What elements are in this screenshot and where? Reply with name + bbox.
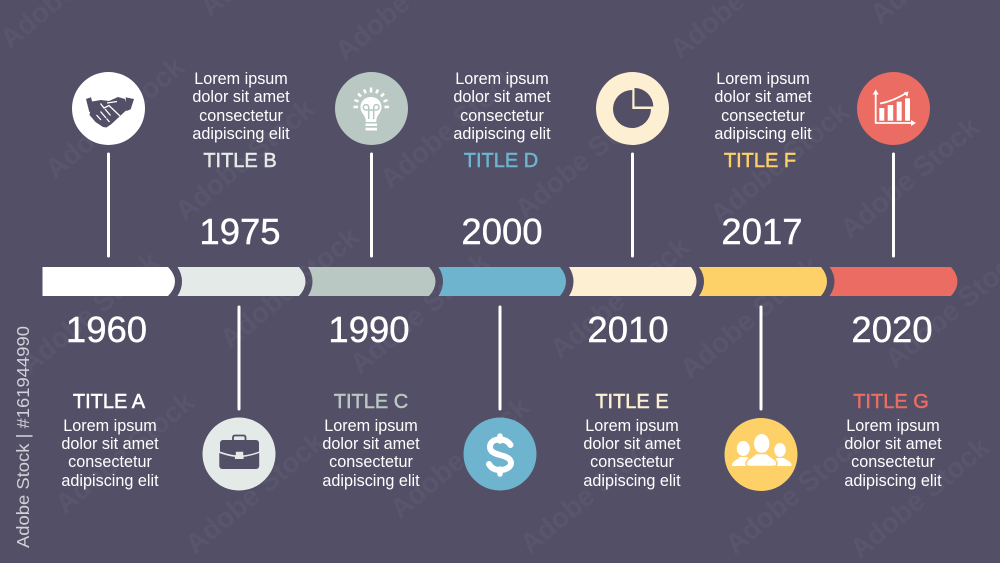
- text: Adobe Stock: [344, 246, 495, 380]
- text: Adobe Stock: [704, 96, 855, 230]
- text: Adobe Stock: [674, 251, 825, 385]
- icon: growth chart: [857, 72, 930, 145]
- block 2010: [583, 309, 681, 490]
- block 1960: consectetur: [68, 453, 152, 471]
- text: Adobe Stock: [214, 221, 365, 355]
- block 1990: adipiscing elit: [322, 472, 420, 490]
- block 1975: adipiscing elit: [192, 125, 290, 143]
- text: Adobe Stock: [719, 426, 870, 560]
- icon: light bulb: [335, 72, 408, 145]
- block 2010: dolor sit amet: [583, 435, 681, 453]
- block 2010: adipiscing elit: [583, 472, 681, 490]
- block 2017: 2017: [721, 211, 803, 252]
- block 1990: Lorem ipsum: [324, 417, 418, 435]
- block 2020: 2020: [851, 309, 933, 350]
- block 1960: TITLE A: [73, 391, 146, 413]
- block 2000: adipiscing elit: [453, 125, 551, 143]
- block 1990: consectetur: [329, 453, 413, 471]
- block 2000: consectetur: [460, 107, 544, 125]
- block 2020: Lorem ipsum: [846, 417, 940, 435]
- icon: dollar: [464, 418, 536, 490]
- segment 1975: [178, 267, 306, 296]
- block 2010: consectetur: [590, 453, 674, 471]
- segment 2020: [830, 267, 958, 296]
- block 2017: adipiscing elit: [714, 125, 812, 143]
- block 2010: Lorem ipsum: [585, 417, 679, 435]
- segment 2000: [438, 267, 566, 296]
- block 1990: TITLE C: [334, 391, 408, 413]
- block 2010: TITLE E: [595, 391, 669, 413]
- block 1960: [61, 309, 159, 490]
- block 1960: dolor sit amet: [61, 435, 159, 453]
- block 2017: consectetur: [721, 107, 805, 125]
- icon: people: [724, 418, 798, 491]
- text: Adobe Stock: [39, 51, 190, 185]
- block 1990: [322, 309, 420, 490]
- block 1975: dolor sit amet: [192, 88, 290, 106]
- text: Adobe Stock: [544, 231, 695, 365]
- block 2020: consectetur: [851, 453, 935, 471]
- stock id label: Adobe Stock | #161944990: [13, 326, 33, 548]
- text: Adobe Stock: [14, 246, 165, 380]
- block 2020: dolor sit amet: [844, 435, 942, 453]
- text: Adobe Stock: [844, 431, 995, 563]
- block 1975: consectetur: [199, 107, 283, 125]
- segment 1990: [308, 267, 436, 296]
- text: Adobe Stock: [384, 391, 535, 525]
- text: Adobe Stock: [509, 91, 660, 225]
- block 2020: TITLE G: [853, 391, 929, 413]
- timeline bar: [42, 267, 958, 296]
- connector lines: [108, 154, 894, 409]
- block 1975: Lorem ipsum: [194, 70, 288, 88]
- text: Adobe Stock: [169, 93, 320, 227]
- block 2017: dolor sit amet: [714, 88, 812, 106]
- block 2017: [714, 70, 812, 252]
- block 1975: 1975: [199, 211, 281, 252]
- icon: pie chart: [596, 72, 669, 145]
- block 2000: 2000: [461, 211, 543, 252]
- block 2000: [453, 70, 551, 252]
- text: Adobe Stock: [374, 61, 525, 195]
- block 1960: 1960: [66, 309, 147, 350]
- block 1975: TITLE B: [203, 150, 277, 172]
- block 2017: TITLE F: [724, 150, 796, 172]
- block 2020: adipiscing elit: [844, 472, 942, 490]
- segment 2010: [569, 267, 696, 296]
- block 2000: Lorem ipsum: [455, 70, 549, 88]
- block 1990: 1990: [328, 309, 410, 350]
- block 2020: [844, 309, 942, 490]
- text: Adobe Stock: [834, 111, 985, 245]
- icon: handshake: [72, 72, 145, 145]
- text: Adobe Stock: [514, 426, 665, 560]
- segment 1960: [42, 267, 175, 296]
- block 2000: dolor sit amet: [453, 88, 551, 106]
- block 1975: [192, 70, 290, 252]
- block 1960: Lorem ipsum: [63, 417, 157, 435]
- block 1990: dolor sit amet: [322, 435, 420, 453]
- text: Adobe Stock: [179, 426, 330, 560]
- segment 2017: [699, 267, 827, 296]
- block 2000: TITLE D: [464, 150, 538, 172]
- block 2017: Lorem ipsum: [716, 70, 810, 88]
- text: Adobe Stock: [49, 386, 200, 520]
- block 1960: adipiscing elit: [61, 472, 159, 490]
- icon: briefcase: [202, 418, 276, 490]
- block 2010: 2010: [587, 309, 669, 350]
